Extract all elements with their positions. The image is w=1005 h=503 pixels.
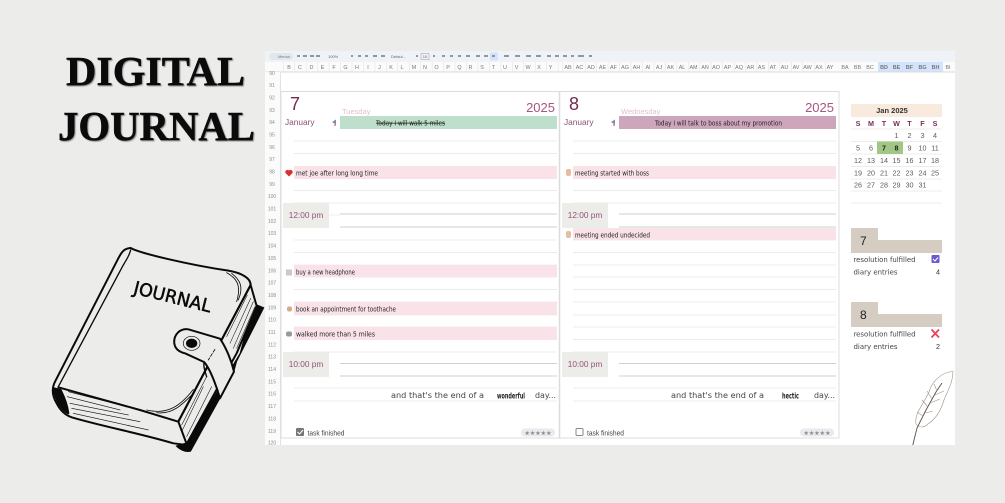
row numbers: 113 — [268, 354, 276, 360]
summary card: day 8 — [851, 302, 942, 351]
weekday: Tuesday — [342, 107, 371, 116]
time block: 10:00 pm — [283, 352, 329, 377]
calendar: 20 — [867, 168, 875, 178]
row numbers — [265, 71, 280, 446]
column headers: AI — [645, 65, 651, 71]
column headers: AY — [827, 65, 834, 71]
row numbers: 109 — [268, 306, 276, 312]
calendar: 8 — [894, 144, 898, 152]
column headers: AB — [564, 65, 572, 71]
icon: tooth — [287, 306, 292, 312]
end of day sentence: day... — [535, 391, 556, 400]
calendar: 18 — [931, 156, 939, 165]
icon: headphones note — [286, 270, 292, 276]
panel: journal frame — [281, 92, 839, 438]
row numbers: 110 — [268, 318, 276, 324]
weekday: Wednesday — [621, 107, 661, 116]
entry: appointment — [294, 302, 557, 315]
summary card: day 8: resolution fulfilled — [854, 330, 916, 338]
summary card: day 7: resolution fulfilled — [854, 255, 916, 264]
summary card: day 7 — [851, 228, 942, 276]
column headers: AN — [701, 65, 709, 71]
column headers: AL — [679, 65, 685, 71]
calendar: 25 — [931, 168, 939, 178]
end of day sentence — [391, 391, 556, 400]
title — [58, 48, 255, 149]
calendar: 15 — [892, 156, 900, 165]
row numbers: 116 — [268, 392, 276, 398]
calendar: T — [907, 119, 912, 128]
row numbers: 107 — [268, 280, 276, 286]
calendar: T — [882, 119, 887, 128]
calendar: 10 — [918, 144, 926, 152]
column headers: O — [434, 65, 439, 71]
column headers — [265, 62, 955, 72]
spreadsheet toolbar: 10 — [423, 54, 428, 59]
calendar: 1 — [894, 131, 898, 140]
row numbers: 102 — [268, 219, 276, 225]
row numbers: 114 — [268, 367, 276, 373]
time block: 10:00 pm — [562, 352, 608, 377]
column headers: AP — [724, 65, 731, 71]
resolution banner: Today I will talk to boss about my promotion — [654, 118, 782, 128]
column headers: X — [537, 65, 541, 71]
calendar: 29 — [892, 180, 900, 190]
time block: 12:00 pm: 12:00 pm — [289, 210, 323, 220]
entry: walked: walked more than 5 miles — [296, 330, 375, 338]
spreadsheet toolbar — [265, 51, 955, 62]
calendar: 28 — [880, 180, 888, 190]
calendar: 13 — [867, 156, 875, 165]
entry: headphone — [294, 265, 557, 278]
entry: appointment: book an appointment for toothache — [296, 304, 396, 314]
end of day sentence: wonderful — [497, 392, 525, 400]
column headers: BF — [906, 65, 914, 71]
column headers: AD — [587, 65, 595, 71]
column headers: AG — [621, 65, 629, 71]
column headers: M — [412, 65, 417, 71]
end of day sentence: and that's the end of a — [391, 391, 484, 400]
calendar: 7 — [882, 144, 886, 152]
year: 2025 — [805, 100, 834, 115]
icon: megaphone — [611, 120, 615, 126]
calendar: 9 — [908, 144, 912, 152]
star rating: ★★★★★ — [804, 430, 830, 437]
column headers: BD — [880, 65, 888, 71]
entry: meeting ended — [573, 228, 836, 240]
row numbers: 106 — [268, 268, 276, 274]
entry: meeting ended: meeting ended undecided — [575, 230, 650, 240]
calendar: 6 — [869, 144, 873, 152]
row numbers: 91 — [269, 83, 275, 89]
calendar: Jan 2025 — [876, 106, 908, 115]
row numbers: 120 — [268, 440, 276, 446]
row numbers: 94 — [269, 120, 275, 126]
task finished checkbox — [296, 428, 345, 438]
calendar: 31 — [918, 180, 926, 190]
row numbers: 100 — [268, 194, 276, 200]
row numbers: 119 — [268, 429, 276, 435]
column headers: C — [298, 65, 302, 71]
end of day sentence — [671, 391, 835, 400]
calendar: 19 — [854, 168, 862, 178]
column headers: BG — [918, 65, 927, 71]
column headers: S — [480, 65, 484, 71]
row numbers: 103 — [268, 231, 276, 237]
column headers: V — [515, 65, 519, 71]
journal cover lettering: JOURNAL — [130, 278, 213, 317]
title: JOURNAL — [58, 103, 255, 149]
entry: met joe — [294, 166, 557, 179]
column headers: AT — [770, 65, 777, 71]
row numbers: 99 — [269, 182, 275, 188]
column headers: P — [446, 65, 450, 71]
column headers: BE — [893, 65, 901, 71]
column headers: G — [343, 65, 348, 71]
row numbers: 118 — [268, 416, 276, 422]
column headers: I — [367, 65, 369, 71]
column headers: AS — [758, 65, 765, 71]
time block: 12:00 pm — [562, 203, 608, 228]
entry: meeting started — [573, 166, 836, 179]
column headers: AX — [815, 65, 823, 71]
resolution banner — [619, 116, 836, 129]
column headers: U — [503, 65, 507, 71]
year: 2025 — [526, 100, 555, 115]
calendar: 23 — [906, 168, 914, 178]
icon: thumbs down — [566, 231, 571, 238]
column headers: AU — [781, 65, 788, 71]
calendar: 5 — [856, 144, 860, 152]
column headers: T — [492, 65, 496, 71]
column headers: AQ — [735, 65, 743, 71]
calendar: 27 — [867, 180, 875, 190]
column headers: D — [310, 65, 314, 71]
column headers: AK — [667, 65, 674, 71]
calendar: 26 — [854, 180, 862, 190]
summary card: day 7: 7 — [860, 234, 867, 248]
row numbers: 105 — [268, 256, 276, 262]
column headers: Q — [457, 65, 462, 71]
row numbers: 112 — [268, 342, 276, 348]
column headers: B — [287, 65, 291, 71]
calendar: M — [868, 119, 874, 128]
row numbers: 98 — [269, 170, 275, 176]
summary card: day 7: diary entries — [854, 268, 898, 276]
spreadsheet toolbar: 100% — [328, 54, 339, 59]
entry: walked — [294, 327, 557, 340]
icon: journal book illustration — [53, 248, 264, 452]
row numbers: 96 — [269, 145, 275, 151]
column headers: W — [525, 65, 531, 71]
row numbers: 101 — [268, 206, 276, 212]
column headers: AJ — [656, 65, 662, 71]
calendar: 4 — [933, 131, 937, 140]
column headers: R — [469, 65, 473, 71]
column headers: Y — [549, 65, 553, 71]
calendar: 14 — [880, 156, 888, 165]
icon: megaphone — [332, 120, 336, 126]
entry: meeting started: meeting started with boss — [575, 168, 649, 178]
column headers: AH — [633, 65, 640, 71]
calendar: 17 — [918, 156, 926, 165]
end of day sentence: day... — [814, 391, 835, 400]
summary card: day 8: 8 — [860, 308, 867, 322]
column headers: BC — [866, 65, 874, 71]
time block: 10:00 pm: 10:00 pm — [289, 359, 323, 369]
column headers: N — [423, 65, 427, 71]
column headers: AE — [599, 65, 606, 71]
column headers: AM — [689, 65, 698, 71]
row numbers: 93 — [269, 108, 275, 114]
calendar: 12 — [854, 156, 862, 165]
row numbers: 108 — [268, 293, 276, 299]
column headers: AW — [803, 65, 813, 71]
month: January — [285, 117, 315, 127]
row numbers: 90 — [269, 71, 275, 77]
column headers: AV — [793, 65, 800, 71]
star rating — [800, 428, 834, 437]
row numbers: 92 — [269, 96, 275, 102]
summary card: day 7: 4 — [936, 268, 940, 276]
column headers: AF — [610, 65, 618, 71]
calendar: 30 — [906, 180, 914, 190]
column headers: J — [378, 65, 381, 71]
calendar: W — [893, 119, 900, 128]
calendar: 21 — [880, 168, 888, 178]
calendar: 22 — [892, 168, 900, 178]
calendar: F — [920, 119, 925, 128]
icon: purple checked box — [932, 255, 940, 263]
time block: 12:00 pm — [283, 203, 329, 228]
icon: shoe — [286, 332, 292, 336]
end of day sentence: and that's the end of a — [671, 391, 764, 400]
task finished checkbox — [576, 428, 624, 438]
calendar: 2 — [908, 131, 912, 140]
column headers: H — [355, 65, 359, 71]
row numbers: 95 — [269, 132, 275, 138]
column headers: E — [321, 65, 325, 71]
spreadsheet toolbar: Menus — [278, 54, 290, 59]
column headers: BA — [841, 65, 849, 71]
panel: spreadsheet window — [265, 51, 955, 446]
calendar: S — [856, 119, 861, 128]
calendar: 16 — [906, 156, 914, 165]
column headers: L — [400, 65, 404, 71]
day number 7: 7 — [290, 94, 300, 114]
icon: thumbs up — [566, 169, 571, 176]
icon: feather quill — [913, 372, 953, 445]
spreadsheet toolbar: Defaul... — [391, 54, 406, 59]
calendar: 24 — [918, 168, 926, 178]
column headers: AR — [747, 65, 754, 71]
summary card: day 8: diary entries — [854, 342, 898, 351]
row numbers: 115 — [268, 380, 276, 386]
calendar — [851, 104, 942, 203]
resolution banner — [340, 116, 557, 129]
calendar: 11 — [931, 144, 939, 152]
title: DIGITAL — [66, 48, 245, 94]
day number 8: 8 — [569, 94, 579, 114]
column headers: K — [389, 65, 393, 71]
icon: red cross — [932, 330, 939, 338]
column headers: BB — [854, 65, 861, 71]
summary card: day 8: 2 — [936, 342, 940, 351]
column headers: BH — [932, 65, 939, 71]
entry: headphone: buy a new headphone — [296, 268, 355, 276]
calendar: S — [933, 119, 938, 128]
row numbers: 117 — [268, 404, 276, 410]
time block: 12:00 pm: 12:00 pm — [568, 210, 602, 220]
month: January — [564, 117, 594, 127]
star rating — [521, 428, 555, 437]
end of day sentence: hectic — [782, 392, 799, 400]
row numbers: 111 — [268, 330, 276, 336]
column headers: AC — [576, 65, 583, 71]
entry: met joe: met joe after long long time — [296, 168, 378, 178]
star rating: ★★★★★ — [525, 430, 551, 437]
time block: 10:00 pm: 10:00 pm — [568, 359, 602, 369]
row numbers: 104 — [268, 244, 276, 250]
panel: day 7 page — [283, 94, 557, 438]
resolution banner: Today I will walk 5 miles — [375, 118, 445, 128]
panel: day 8 page — [562, 94, 836, 438]
column headers: F — [332, 65, 336, 71]
calendar: 3 — [920, 131, 924, 140]
row numbers: 97 — [269, 157, 275, 163]
task finished checkbox: task finished — [587, 430, 624, 438]
column headers: BI — [945, 65, 951, 71]
icon: heart — [285, 170, 293, 176]
task finished checkbox: task finished — [308, 430, 345, 438]
column headers: AO — [712, 65, 720, 71]
